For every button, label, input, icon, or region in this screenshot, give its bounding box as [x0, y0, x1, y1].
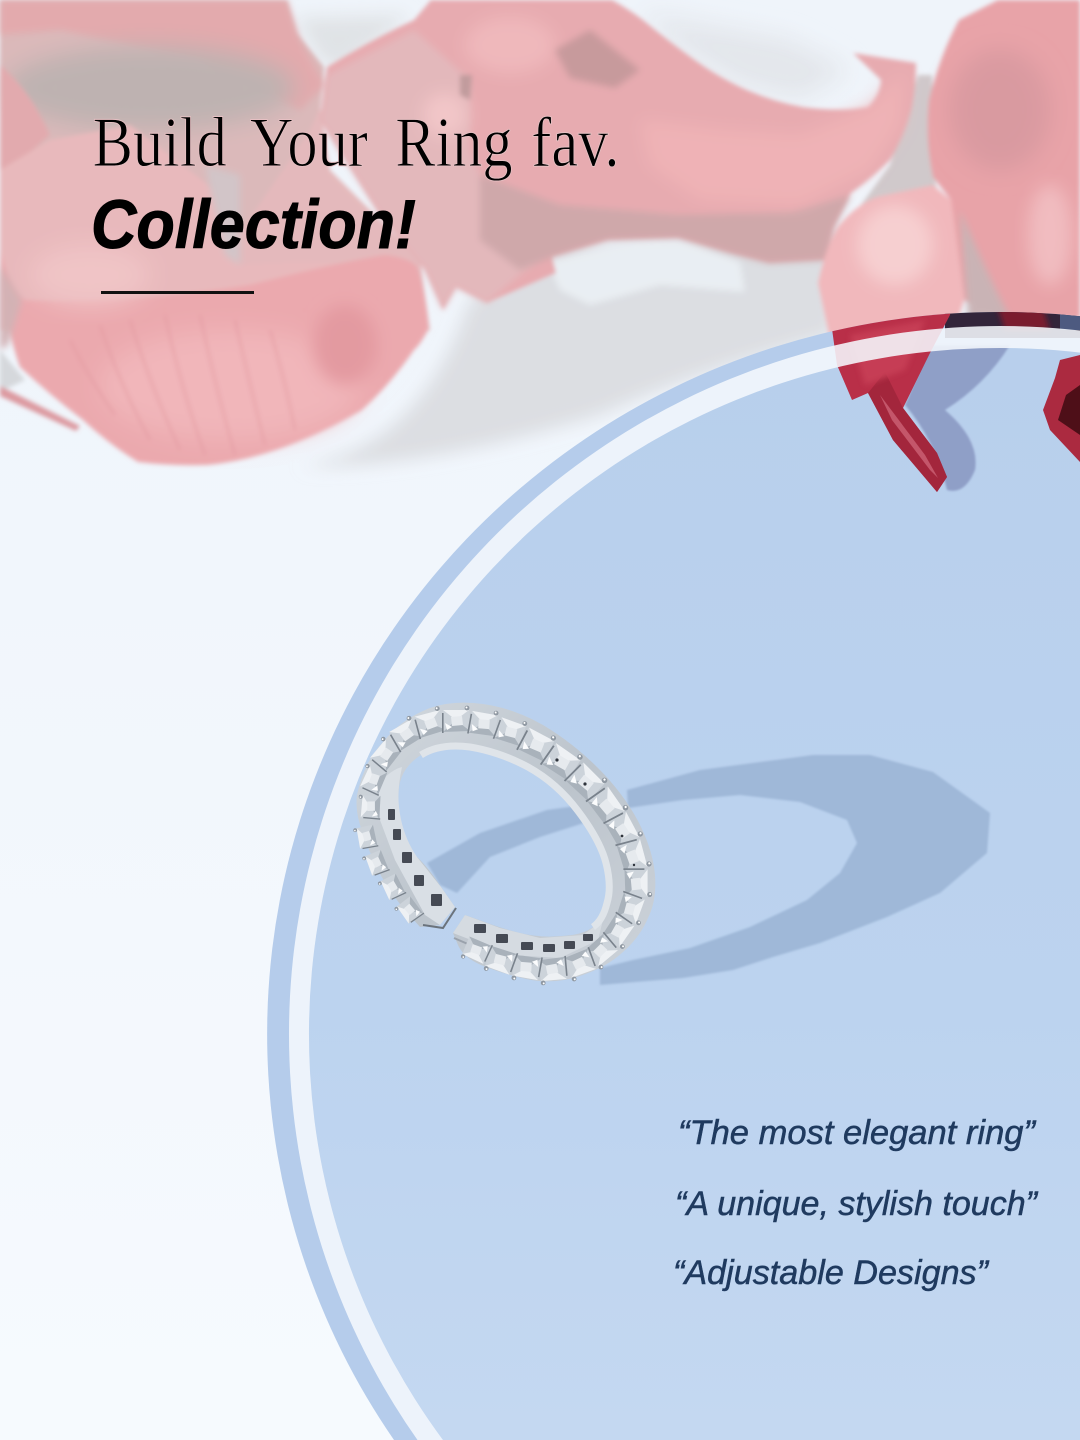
stem shadow — [905, 345, 1010, 491]
shadow cast far right — [600, 755, 990, 985]
title line two: Collection! — [91, 186, 416, 263]
petal: left edge — [0, 65, 50, 178]
dark glints on gems — [555, 758, 635, 866]
title — [91, 104, 619, 263]
open ends — [423, 908, 456, 928]
petal: upper left pink top — [0, 0, 325, 110]
petal highlights and ribs — [100, 330, 360, 440]
grey petal shadows — [0, 12, 960, 466]
grey wedge between petals — [205, 165, 240, 265]
vivid petal with stem — [832, 314, 950, 492]
petal shade: dark heart — [5, 46, 295, 130]
vivid petal right — [1043, 355, 1080, 462]
centre petal dark lower band — [480, 175, 851, 270]
title underline — [101, 291, 254, 294]
vivid petals and shadow inside the circle — [828, 300, 1080, 492]
title line one: Ring — [395, 104, 513, 182]
inner rim highlight — [421, 746, 609, 927]
centre petal grey-pink left part — [320, 30, 540, 310]
petal: lower right light — [818, 185, 964, 335]
quote one: “The most elegant ring” — [678, 1114, 1037, 1152]
inner polished strip, left — [378, 767, 455, 925]
petal: big bottom left — [0, 250, 428, 465]
square cut-outs — [388, 809, 593, 952]
title line one: fav. — [531, 104, 619, 182]
petal: thin stem lower left — [0, 386, 80, 431]
metal band body — [356, 703, 655, 981]
petal: middle left pale — [0, 125, 428, 330]
petal base under left cluster — [0, 0, 430, 360]
grey left margin — [0, 265, 22, 350]
circle panel — [267, 300, 1080, 1440]
centre petal light ribbon — [640, 70, 905, 205]
petal: upper left — [0, 0, 324, 240]
shadow inside ring hole — [427, 805, 587, 893]
light streak across shadow — [548, 240, 745, 305]
silver ring — [353, 703, 655, 986]
inner blue disc — [309, 348, 1080, 1440]
petal: centre — [320, 0, 916, 310]
quote two: “A unique, stylish touch” — [675, 1185, 1039, 1223]
faded petals and shadows, top area — [0, 0, 1080, 466]
quotes — [673, 1114, 1039, 1292]
title line one: Your — [250, 104, 368, 182]
outer blue band — [267, 312, 1080, 1440]
dark band behind petal — [945, 312, 1080, 338]
centre petal dark holes — [555, 30, 640, 88]
ring shadow on the surface — [427, 755, 990, 985]
white translucent ring — [289, 326, 1080, 1440]
petal: top right — [928, 0, 1080, 318]
centre petal highlights — [465, 17, 555, 73]
quote three: “Adjustable Designs” — [673, 1254, 990, 1292]
inner polished strip, bottom — [453, 915, 603, 958]
gemstones — [353, 706, 652, 986]
title line one: Build — [93, 104, 227, 182]
